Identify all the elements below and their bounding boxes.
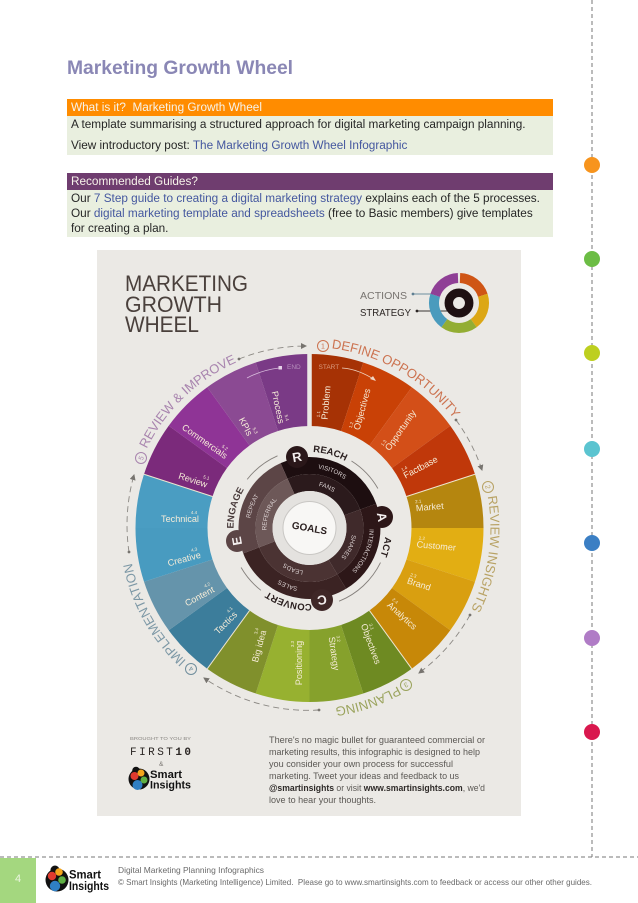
label: Positioning: 3.3 — [290, 640, 295, 647]
footer Smart Insights logo: Smart — [69, 870, 101, 882]
panel: what is it — [67, 99, 553, 155]
numbered section badges — [136, 340, 494, 690]
label: leads: LEADS — [283, 564, 303, 575]
hub ring separators — [241, 456, 380, 601]
curved section titles — [123, 340, 500, 716]
growth wheel — [123, 340, 500, 716]
segment group 4: implementation — [127, 474, 252, 669]
segment group 5: review and improve — [144, 346, 331, 498]
page number box: 4 — [15, 873, 21, 885]
label: Factbase: 1.4 — [400, 465, 409, 472]
footer text — [118, 866, 592, 887]
badge 2 — [482, 482, 494, 492]
badge A — [371, 506, 393, 528]
footer text: © Smart Insights (Marketing Intelligence) Limited. Please go to www.smartinsights.com to feedback or access our other other guides. — [118, 878, 592, 887]
credits: brought to you by — [128, 736, 192, 792]
vertical dashed timeline — [584, 0, 600, 857]
label: Review: 5.1 — [203, 474, 211, 481]
label: Customer: Customer — [416, 539, 456, 553]
label: Factbase: Factbase — [402, 454, 439, 481]
footer dashed rule — [0, 856, 638, 858]
poster title — [125, 271, 248, 337]
label: Customer: 2.2 — [419, 535, 426, 541]
label: Problem: 1.1 — [316, 410, 321, 417]
legend donut: strategy ring — [449, 293, 469, 313]
badge A: A — [374, 511, 390, 524]
section title: implementation: IMPLEMENTATION — [123, 564, 186, 666]
badge 2: 2 — [483, 485, 491, 490]
poster paragraph: marketing results, this infographic is designed to help — [269, 746, 480, 757]
badge 3: 3 — [402, 680, 409, 688]
purple heading bar — [67, 173, 553, 190]
legend labels: ACTIONS — [360, 290, 407, 302]
badge R: R — [291, 449, 304, 465]
footer Smart Insights logo: Insights — [69, 881, 109, 893]
label: Opportunity: 1.3 — [380, 439, 388, 447]
label: Process: 5.4 — [284, 414, 290, 422]
label: Market: Market — [415, 501, 444, 513]
badge 4 — [186, 664, 196, 674]
poster paragraph: @smartinsights or visit www.smartinsights.com, we'd — [269, 782, 485, 793]
timeline dot: blue — [584, 535, 600, 551]
label: Analytics: 2.4 — [391, 597, 400, 605]
Smart Insights logo in poster: Insights — [150, 780, 191, 792]
badge C: C — [315, 592, 328, 608]
footer Smart Insights logo — [46, 866, 109, 893]
hub light disc — [210, 428, 410, 628]
strategy hub — [227, 446, 392, 611]
timeline dot: crimson — [584, 724, 600, 740]
hub stage titles — [227, 446, 392, 611]
title: reach: REACH — [314, 446, 348, 461]
label: Commercials: Commercials — [180, 422, 230, 461]
introductory post link: View introductory post: The Marketing Growth Wheel Infographic — [71, 139, 407, 152]
label: Problem: Problem — [320, 385, 332, 420]
legend connector lines — [412, 293, 450, 312]
badge 5 — [136, 452, 146, 464]
orange heading bar — [67, 99, 553, 116]
ampersand: & — [159, 761, 164, 768]
badge R — [286, 446, 308, 468]
badge 1 — [318, 340, 328, 352]
badge 3 — [400, 680, 412, 690]
label: Big idea: Big idea — [250, 628, 268, 663]
poster paragraph — [269, 734, 485, 805]
title: convert: CONVERT — [264, 592, 312, 611]
hub ring labels — [246, 464, 374, 591]
label: repeat: REPEAT — [246, 494, 258, 518]
logo mark — [46, 866, 68, 892]
label: visitors: VISITORS — [318, 464, 346, 479]
label: Tactics: Tactics — [213, 609, 240, 636]
segment labels — [161, 385, 457, 685]
label: Big idea: 3.4 — [253, 627, 260, 635]
orange heading bar: What is it? Marketing Growth Wheel — [71, 101, 262, 114]
poster paragraph: marketing. Tweet your ideas and feedback to us — [269, 770, 459, 781]
timeline dot: green — [584, 251, 600, 267]
end label and arrow: END — [287, 364, 301, 371]
timeline dot: purple — [584, 630, 600, 646]
label: Content: 4.2 — [203, 581, 212, 589]
legend: actions and strategy: STRATEGY — [360, 307, 411, 319]
poster title: WHEEL — [125, 312, 199, 337]
Smart Insights logo in poster — [128, 767, 191, 792]
label: Strategy: 3.2 — [336, 635, 341, 643]
hub badges — [226, 446, 393, 611]
poster paragraph: love to hear your thoughts. — [269, 794, 376, 805]
Smart Insights logo in poster: Smart — [150, 769, 182, 781]
hub sector: act — [329, 504, 380, 589]
label: Creative: 4.3 — [190, 546, 198, 553]
segment group 1: define opportunity — [310, 354, 482, 514]
legend donut: actions ring — [434, 278, 484, 328]
label: Objectives 1.2: Objectives — [352, 387, 373, 431]
timeline dot: cyan — [584, 441, 600, 457]
START and END markers — [247, 364, 376, 381]
poster title: MARKETING — [125, 271, 248, 296]
segment group 2: review insights — [356, 474, 492, 674]
title: act: ACT — [381, 537, 392, 558]
guides text: Our 7 Step guide to creating a digital marketing strategy explains each of the 5 processes. — [71, 192, 540, 205]
label: Opportunity: Opportunity — [383, 408, 418, 452]
timeline dot: orange — [584, 157, 600, 173]
segment group 3: planning — [205, 604, 412, 710]
hub sector: reach — [281, 457, 376, 515]
section title: define opportunity: DEFINE OPPORTUNITY — [332, 340, 461, 416]
title: engage: ENGAGE — [227, 486, 244, 528]
timeline dot: lime — [584, 345, 600, 361]
badge C — [311, 589, 333, 611]
panel: recommended guides — [67, 173, 553, 237]
label: Commercials: 5.2 — [221, 444, 229, 452]
label: KPIs: KPIs — [237, 416, 255, 438]
label: sales: SALES — [278, 580, 298, 591]
section title: planning: PLANNING — [336, 686, 401, 716]
First10 wordmark: FIRST10 — [130, 747, 191, 759]
label: Analytics: Analytics — [385, 600, 419, 632]
label: Tactics: 4.1 — [226, 605, 234, 614]
credits: brought to you by: BROUGHT TO YOU BY — [130, 736, 192, 742]
legend: actions and strategy — [360, 278, 484, 328]
start label and arrow: START — [318, 364, 339, 371]
label: KPIs: 5.3 — [251, 427, 259, 435]
section title: review and improve: REVIEW & IMPROVE — [139, 354, 236, 448]
label: Content: Content — [183, 584, 216, 608]
badge 5: 5 — [138, 455, 146, 461]
label: Market: 2.1 — [415, 499, 422, 504]
badge 1: 1 — [321, 344, 325, 350]
label: Objectives 3.1: 3.1 — [368, 623, 375, 631]
logo mark — [128, 767, 150, 790]
guides text — [71, 192, 540, 235]
badge E — [226, 530, 248, 552]
label: Technical: Technical — [161, 514, 199, 524]
goals centre — [272, 491, 346, 565]
label: KPIs — [237, 414, 259, 439]
goals centre: GOALS — [291, 520, 328, 538]
arrow start dots — [128, 358, 471, 711]
label: Creative: Creative — [167, 550, 202, 568]
label: Process: Process — [270, 390, 286, 425]
purple heading bar: Recommended Guides? — [71, 175, 198, 188]
badge E: E — [229, 535, 245, 547]
poster background — [97, 250, 521, 816]
poster title: GROWTH — [125, 292, 222, 317]
poster paragraph: There's no magic bullet for guaranteed commercial or — [269, 734, 485, 745]
badge 4: 4 — [188, 664, 195, 672]
hub sector: engage — [238, 463, 294, 553]
label: Technical: 4.4 — [191, 510, 198, 515]
label: interactions: INTERACTIONS — [352, 530, 374, 573]
label: Brand: Brand — [406, 576, 432, 593]
page number box — [0, 858, 36, 903]
guides text: for creating a plan. — [71, 222, 168, 235]
label: referral: REFERRAL — [262, 498, 277, 530]
label: fans: FANS — [319, 482, 335, 492]
hub sector: convert — [243, 541, 346, 599]
label: shares: SHARES — [342, 535, 356, 560]
poster paragraph: you consider your own process for successful — [269, 758, 453, 769]
label: Objectives 1.2: 1.2 — [348, 421, 355, 429]
guides text: Our digital marketing template and spreadsheets (free to Basic members) give templates — [71, 207, 533, 220]
label: Review: Review — [177, 471, 209, 490]
label: Brand: 2.3 — [410, 572, 418, 579]
footer text: Digital Marketing Planning Infographics — [118, 866, 264, 875]
description text: A template summarising a structured approach for digital marketing campaign planning. — [71, 118, 526, 131]
label: Positioning: Positioning — [294, 641, 304, 685]
label: Strategy: Strategy — [327, 636, 341, 671]
page title: Marketing Growth Wheel — [67, 58, 293, 79]
dashed cycle arrows — [127, 346, 482, 710]
section title: review insights: REVIEW INSIGHTS — [472, 496, 500, 612]
label: Objectives 3.1: Objectives — [359, 622, 383, 666]
